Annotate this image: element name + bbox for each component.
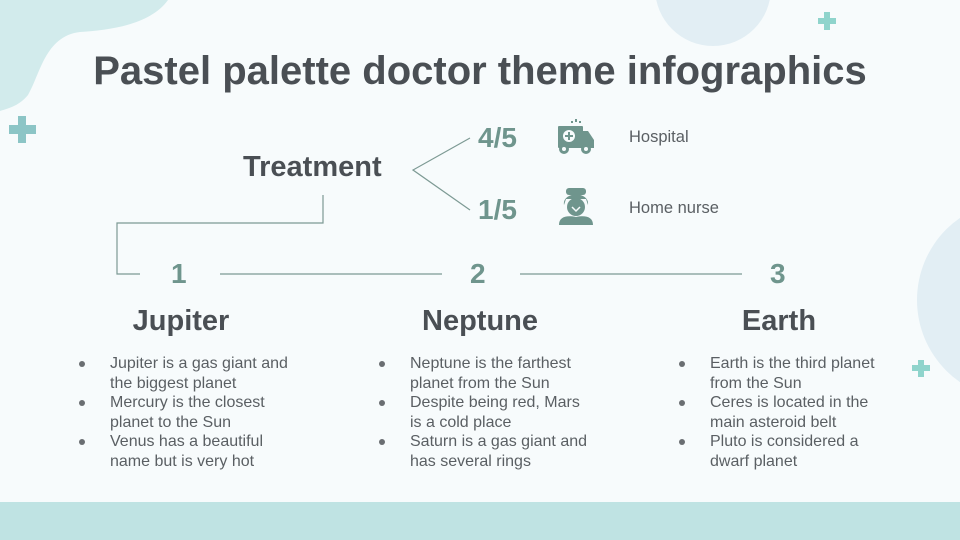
text: Mercury is the closest planet to the Sun	[110, 394, 265, 430]
text: Jupiter	[133, 305, 229, 337]
text: Jupiter is a gas giant and the biggest planet	[110, 355, 288, 392]
blob top-left	[0, 0, 168, 111]
column 2	[379, 258, 587, 470]
text: Neptune is the farthest planet from the Sun	[410, 355, 571, 392]
text: Venus has a beautiful name but is very hot	[110, 433, 263, 470]
text: 3	[770, 258, 786, 289]
column 3	[679, 258, 875, 470]
text: Saturn is a gas giant and has several rings	[410, 433, 587, 470]
text: Earth	[742, 305, 816, 337]
title: Pastel palette doctor theme infographics	[93, 49, 867, 93]
label: hospital: Hospital	[629, 128, 689, 146]
bottom band	[0, 502, 960, 540]
text: Despite being red, Mars is a cold place	[410, 394, 580, 430]
connector lines	[117, 138, 742, 274]
text: 2	[470, 258, 486, 289]
text: Pluto is considered a dwarf planet	[710, 433, 859, 470]
text: Earth is the third planet from the Sun	[710, 355, 875, 392]
label: home nurse: Home nurse	[629, 199, 719, 217]
crosses	[9, 116, 36, 143]
circle top	[655, 0, 771, 46]
text: Neptune	[422, 305, 538, 337]
text: Ceres is located in the main asteroid belt	[710, 394, 868, 430]
column 1	[79, 258, 288, 470]
circle right	[917, 200, 960, 400]
icon: nurse	[559, 188, 593, 225]
icon: ambulance	[558, 119, 594, 154]
heading: treatment: Treatment	[243, 151, 382, 183]
stat 1/5: 1/5	[478, 194, 517, 225]
text: 1	[171, 258, 187, 289]
stat 4/5: 4/5	[478, 122, 517, 153]
